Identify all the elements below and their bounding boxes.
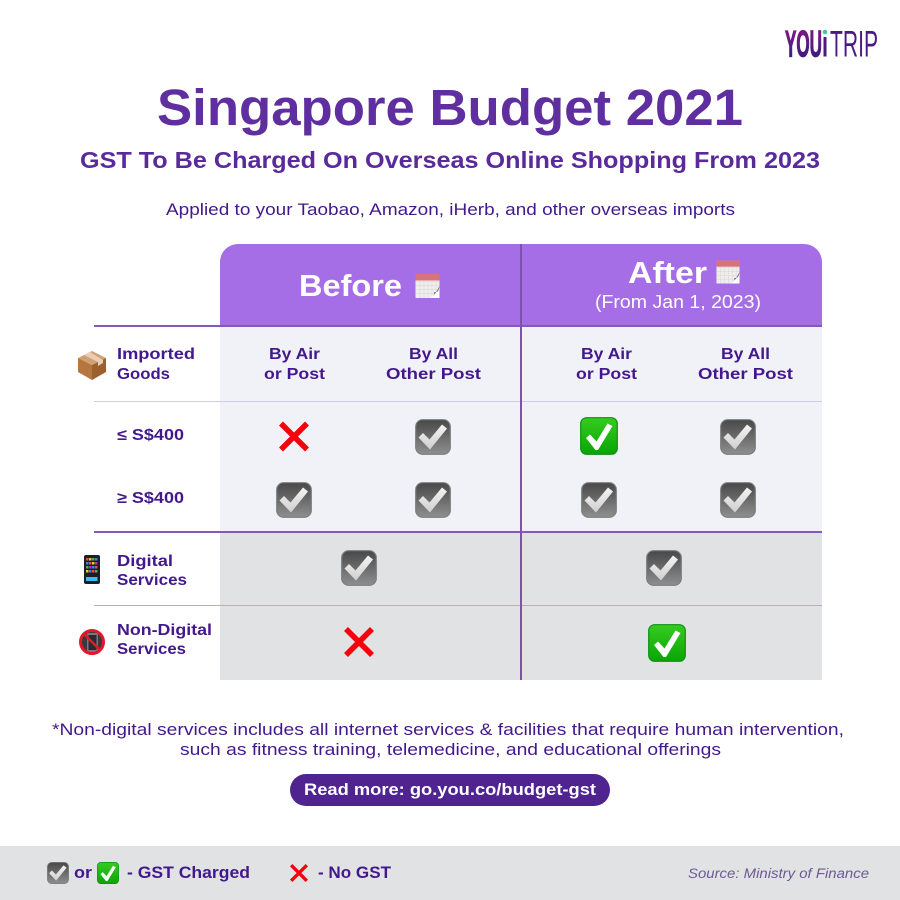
column label: or Post: [576, 366, 637, 383]
row: over S$400: [117, 483, 755, 517]
column label: By All: [409, 346, 458, 363]
footnote: *Non-digital services includes all internet services & facilities that require human intervention,: [52, 721, 844, 739]
row label: Services: [117, 641, 186, 658]
icon: grey check: [277, 483, 311, 517]
icon: grey check: [342, 551, 376, 585]
row: imported goods: [78, 346, 793, 383]
row label: ≥ S$400: [117, 490, 184, 507]
icon: grey check: [416, 420, 450, 454]
icon: grey check: [721, 483, 755, 517]
row: non-digital services: [80, 622, 685, 661]
row label: Goods: [117, 366, 170, 383]
panel: grey body for services: [220, 532, 822, 680]
icon: calendar before: [416, 274, 440, 298]
heading: Before: Before: [299, 268, 402, 303]
intro line: Applied to your Taobao, Amazon, iHerb, and other overseas imports: [166, 201, 735, 219]
icon: cross: [346, 629, 372, 655]
icon: grey check: [416, 483, 450, 517]
panel: light body for imported goods: [220, 326, 822, 532]
read more button: Read more: go.you.co/budget-gst: [304, 781, 597, 799]
icon: green check: [649, 625, 685, 661]
icon: package: [78, 351, 106, 380]
legend text: or: [74, 863, 92, 882]
source: Source: Ministry of Finance: [688, 866, 869, 881]
icon: cross: [281, 424, 307, 450]
heading: After: After: [628, 255, 707, 290]
icon: grey check: [47, 862, 69, 884]
column label: Other Post: [386, 366, 481, 383]
column label: By Air: [269, 346, 320, 363]
icon: cross: [291, 865, 307, 881]
row: digital services: [84, 551, 681, 589]
icon: green check: [97, 862, 119, 884]
subtitle: GST To Be Charged On Overseas Online Shopping From 2023: [80, 147, 820, 173]
row label: Services: [117, 572, 187, 589]
row: up to S$400: [117, 418, 755, 454]
icon: grey check: [582, 483, 616, 517]
row label: Digital: [117, 553, 173, 570]
comparison table: [78, 244, 822, 680]
read more button: [290, 774, 610, 806]
panel: purple header: [220, 244, 822, 326]
column label: or Post: [264, 366, 325, 383]
icon: grey check: [647, 551, 681, 585]
column label: Other Post: [698, 366, 793, 383]
column label: By All: [721, 346, 770, 363]
icon: grey check: [721, 420, 755, 454]
heading: Before: [299, 268, 440, 303]
title: Singapore Budget 2021: [157, 79, 743, 136]
icon: green check: [581, 418, 617, 454]
icon: no phone: [80, 630, 104, 654]
logo: YouTrip: YOU: [785, 24, 822, 64]
heading: After: [595, 255, 761, 312]
legend text: - No GST: [318, 863, 392, 882]
row label: Non-Digital: [117, 622, 212, 639]
legend bar: [0, 846, 900, 900]
icon: calendar after: [716, 260, 740, 284]
after date: (From Jan 1, 2023): [595, 292, 761, 312]
legend text: - GST Charged: [127, 863, 250, 882]
footnote: such as fitness training, telemedicine, and educational offerings: [180, 741, 721, 759]
row label: ≤ S$400: [117, 427, 184, 444]
column label: By Air: [581, 346, 632, 363]
row label: Imported: [117, 346, 195, 363]
icon: phone: [84, 555, 100, 584]
